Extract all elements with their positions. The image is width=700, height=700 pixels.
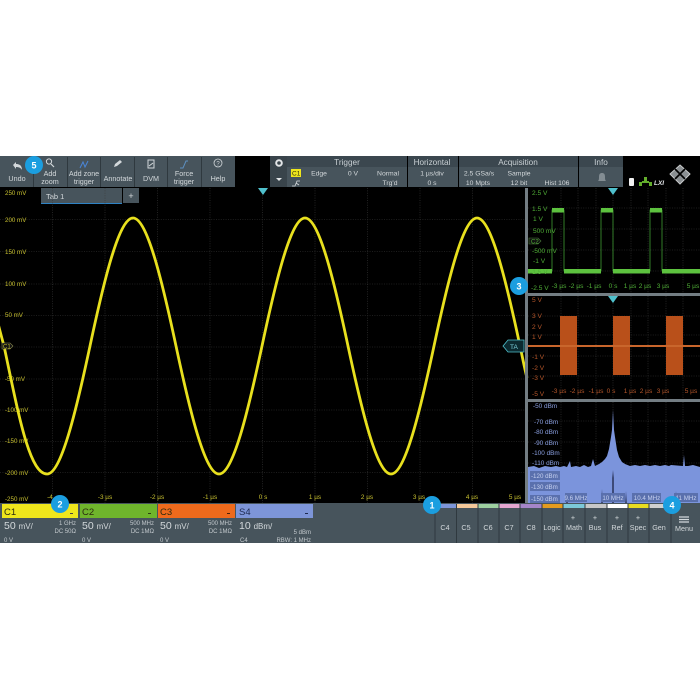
C2 level marker: C2 (531, 240, 539, 246)
x labels: -2 µs (569, 283, 584, 290)
signal bar buttons: + (636, 513, 640, 522)
channel C2 (80, 504, 157, 544)
signal bar buttons: Ref (611, 523, 623, 532)
channel C1: 50 mV/ (4, 520, 34, 532)
tab bar: + (128, 191, 134, 201)
C1 level marker: C1 (3, 344, 11, 350)
signal bar buttons: Logic (543, 523, 561, 532)
panel: trigger: 0 V (348, 170, 359, 178)
channel C2: 50 mV/ (82, 520, 112, 532)
y axis labels: 200 mV (5, 217, 27, 224)
panel: trigger: Trigger (334, 158, 360, 167)
boxed frequency labels: 11 MHz (676, 495, 696, 502)
panel: acquisition: 10 Mpts (466, 180, 491, 187)
y axis labels: 150 mV (5, 249, 27, 256)
x axis labels: 4 µs (466, 494, 478, 501)
spectrum trace (528, 410, 700, 503)
x axis labels: 1 µs (309, 494, 321, 501)
y labels: 500 mV (533, 228, 556, 235)
x labels: 2 µs (640, 388, 653, 395)
x labels: -3 µs (552, 283, 567, 290)
panel: acquisition: 12 bit (511, 180, 527, 187)
signal bar buttons: Gen (652, 523, 666, 532)
panel: trigger: Trg'd (382, 180, 398, 187)
y labels: 1 V (532, 334, 542, 341)
panel: horizontal: 1 µs/div (420, 170, 444, 178)
signal bar buttons: + (615, 513, 619, 522)
y labels: 1 V (533, 216, 543, 223)
badge 4: 4 (669, 500, 675, 510)
signal bar buttons: C4 (440, 523, 450, 532)
button: add zone trigger (69, 161, 99, 186)
y labels: 3 V (532, 313, 542, 320)
x axis labels: -4 (47, 494, 53, 501)
channel S4: RBW: 1 MHz (276, 538, 311, 544)
panel: trigger: Normal (377, 170, 399, 178)
y labels: -2 V (532, 365, 545, 372)
boxed y labels: -130 dBm (531, 484, 558, 491)
x labels: -1 µs (587, 283, 602, 290)
C1 level marker (2, 343, 13, 350)
y labels: -50 dBm (533, 403, 557, 410)
button: add zoom: zoom (41, 177, 59, 186)
y axis labels: 250 mV (5, 190, 27, 197)
channel C2: 0 V (82, 538, 91, 544)
panel: acquisition: Sample (507, 170, 531, 178)
badge 1 (423, 496, 441, 514)
button: DVM (143, 160, 159, 183)
x labels: -1 µs (589, 388, 604, 395)
channel S4: 10 dBm/ (239, 520, 273, 532)
y labels: -3 V (532, 375, 545, 382)
panel: acquisition: Acquisition (498, 158, 538, 167)
y labels: -1.5 V (530, 269, 548, 276)
y axis labels: -100 mV (5, 407, 29, 414)
button: add zoom: Add (44, 169, 56, 178)
signal bar buttons: C6 (483, 523, 493, 532)
tab bar (41, 188, 139, 204)
button: help: Help (211, 174, 225, 183)
C1 trigger source tag: C1 (292, 170, 301, 178)
button: add zone trigger: trigger (74, 177, 95, 186)
icon: bell (598, 173, 606, 181)
tab bar: Tab 1 (46, 192, 64, 201)
y labels: -500 mV (532, 248, 558, 255)
boxed frequency labels: 9.6 MHz (564, 495, 588, 502)
y labels: -70 dBm (534, 419, 558, 426)
x labels: 5 µs (685, 388, 698, 395)
icon: network (639, 177, 652, 186)
panel: horizontal: 0 s (427, 180, 437, 187)
button: add zoom (41, 159, 59, 186)
badge 4 (663, 496, 681, 514)
signal bar buttons: Bus (589, 523, 602, 532)
channel C3: C3 (160, 507, 172, 518)
x labels: 3 µs (657, 283, 670, 290)
sine trace C1 (0, 218, 527, 474)
y labels (532, 403, 560, 467)
panel: acquisition: 2.5 GSa/s (464, 170, 495, 178)
x labels: 5 µs (687, 283, 700, 290)
channel C3: DC 1MΩ (209, 529, 233, 535)
y labels: -90 dBm (534, 440, 558, 447)
panel: C2 green pulse chart (528, 188, 700, 293)
TA trigger arrow tag (503, 340, 524, 352)
panel: trigger (287, 156, 407, 187)
x labels (552, 283, 700, 290)
x labels: 2 µs (639, 283, 652, 290)
boxed y labels: -150 dBm (531, 496, 558, 503)
x axis labels: 3 µs (413, 494, 425, 501)
y labels: -1 V (532, 354, 545, 361)
signal bar buttons: C7 (504, 523, 514, 532)
icon: battery (629, 178, 634, 186)
main waveform chart (0, 188, 527, 503)
oscilloscope screen background (0, 156, 700, 543)
x axis labels: 2 µs (361, 494, 373, 501)
badge 5: 5 (31, 160, 37, 170)
C2 level marker (529, 238, 541, 246)
button: add zone trigger: Add zone (69, 169, 99, 178)
logo: Rohde and Schwarz diamond (670, 165, 690, 184)
y labels: -80 dBm (534, 429, 558, 436)
x labels: 3 µs (657, 388, 670, 395)
button: undo (8, 162, 26, 183)
y axis labels: -200 mV (5, 470, 29, 477)
badge 2 (51, 495, 69, 513)
y labels: -110 dBm (532, 460, 559, 467)
status icons (629, 177, 664, 187)
bottom bar background (0, 503, 700, 543)
channel C3: 0 V (160, 538, 169, 544)
channel C1: C1 (4, 507, 16, 518)
trigger position marker (258, 188, 268, 195)
x axis labels: 5 µs (509, 494, 521, 501)
trigger marker (608, 296, 618, 303)
button: force trigger (174, 161, 195, 186)
y labels (530, 190, 558, 292)
signal bar buttons: + (571, 513, 575, 522)
channel C1: 0 V (4, 538, 13, 544)
button: force trigger: trigger (174, 177, 195, 186)
y labels: -5 V (532, 391, 545, 398)
button: undo: Undo (8, 174, 26, 183)
badge 5 (25, 156, 43, 174)
button: annotate (104, 160, 132, 183)
channel C1 (2, 504, 78, 544)
panel frames (525, 188, 700, 503)
x labels: -3 µs (552, 388, 567, 395)
panel: horizontal (408, 156, 458, 187)
channel S4: 5 dBm (294, 530, 311, 536)
boxed frequency labels: 10.4 MHz (634, 495, 660, 502)
x axis labels: 0 s (259, 494, 267, 501)
y labels: 2 V (532, 324, 542, 331)
x labels: -2 µs (570, 388, 585, 395)
y axis labels (5, 190, 29, 503)
toolbar: tools (0, 156, 235, 187)
x axis labels: -2 µs (150, 494, 164, 501)
channel S4 (236, 504, 313, 544)
panel: C3 orange burst chart (528, 296, 700, 399)
channel C1: DC 50Ω (54, 529, 77, 535)
button: help: ? (216, 162, 220, 168)
y labels (532, 297, 545, 398)
LXI label: LXI (654, 180, 664, 187)
button: DVM: DVM (143, 174, 159, 183)
x axis labels (47, 494, 521, 501)
y labels: 2.5 V (532, 190, 548, 197)
boxed frequency labels (564, 493, 698, 502)
channel S4: S4 (239, 507, 251, 518)
panel: trigger: Edge (311, 170, 327, 178)
x labels: 0 s (607, 388, 616, 395)
channel C1: 1 GHz (59, 521, 76, 527)
signal bar buttons: + (593, 513, 597, 522)
signal bar buttons (435, 504, 693, 543)
y labels: -1 V (533, 258, 546, 265)
panel: info: Info (594, 158, 608, 167)
panel: S4 spectrum chart (528, 402, 700, 503)
channel C3: 500 MHz (208, 521, 232, 527)
boxed frequency labels: 10 MHz (602, 495, 624, 502)
menu button (675, 517, 693, 533)
x labels: 1 µs (624, 388, 637, 395)
x labels: 0 s (609, 283, 618, 290)
channel C2: C2 (82, 507, 94, 518)
y axis labels: 50 mV (5, 312, 24, 319)
x axis labels: -1 µs (203, 494, 217, 501)
TA trigger arrow tag: TA (510, 344, 518, 351)
grid (0, 188, 525, 503)
y axis labels: -250 mV (5, 496, 29, 503)
y axis labels: -50 mV (5, 376, 26, 383)
y labels: 5 V (532, 297, 542, 304)
signal bar buttons: C8 (526, 523, 536, 532)
badge 2: 2 (57, 500, 63, 510)
panel: acquisition (459, 156, 578, 187)
button: help (211, 159, 225, 183)
badge 1: 1 (429, 500, 435, 510)
channel C2: DC 1MΩ (131, 529, 155, 535)
y labels: 1.5 V (532, 206, 548, 213)
x labels: 1 µs (624, 283, 637, 290)
panel: acquisition: Hist 106 (545, 180, 570, 187)
signal bar buttons: Math (566, 523, 582, 532)
channel S4: C4 (240, 538, 248, 544)
settings panel with gear (270, 156, 287, 187)
panel: info (579, 156, 623, 187)
button: force trigger: Force (175, 169, 193, 178)
y labels: -100 dBm (532, 450, 560, 457)
y labels: -2.5 V (531, 285, 549, 292)
x axis labels: -3 µs (98, 494, 112, 501)
panel: horizontal: Horizontal (414, 158, 451, 167)
channel C3: 50 mV/ (160, 520, 190, 532)
channel C2: 500 MHz (130, 521, 154, 527)
channel C3 (158, 504, 235, 544)
y axis labels: 100 mV (5, 281, 27, 288)
pulse trace (528, 208, 700, 274)
trigger marker (608, 188, 618, 195)
badge 3 (510, 277, 528, 295)
boxed y labels: -120 dBm (531, 473, 558, 480)
badge 3: 3 (516, 282, 522, 292)
signal bar buttons: C5 (461, 523, 471, 532)
y axis labels: -150 mV (5, 438, 29, 445)
x labels (552, 388, 698, 395)
menu button: Menu (675, 524, 693, 533)
boxed y labels (530, 471, 560, 503)
burst trace (528, 316, 700, 375)
button: annotate: Annotate (104, 174, 132, 183)
signal bar buttons: Spec (630, 523, 647, 532)
